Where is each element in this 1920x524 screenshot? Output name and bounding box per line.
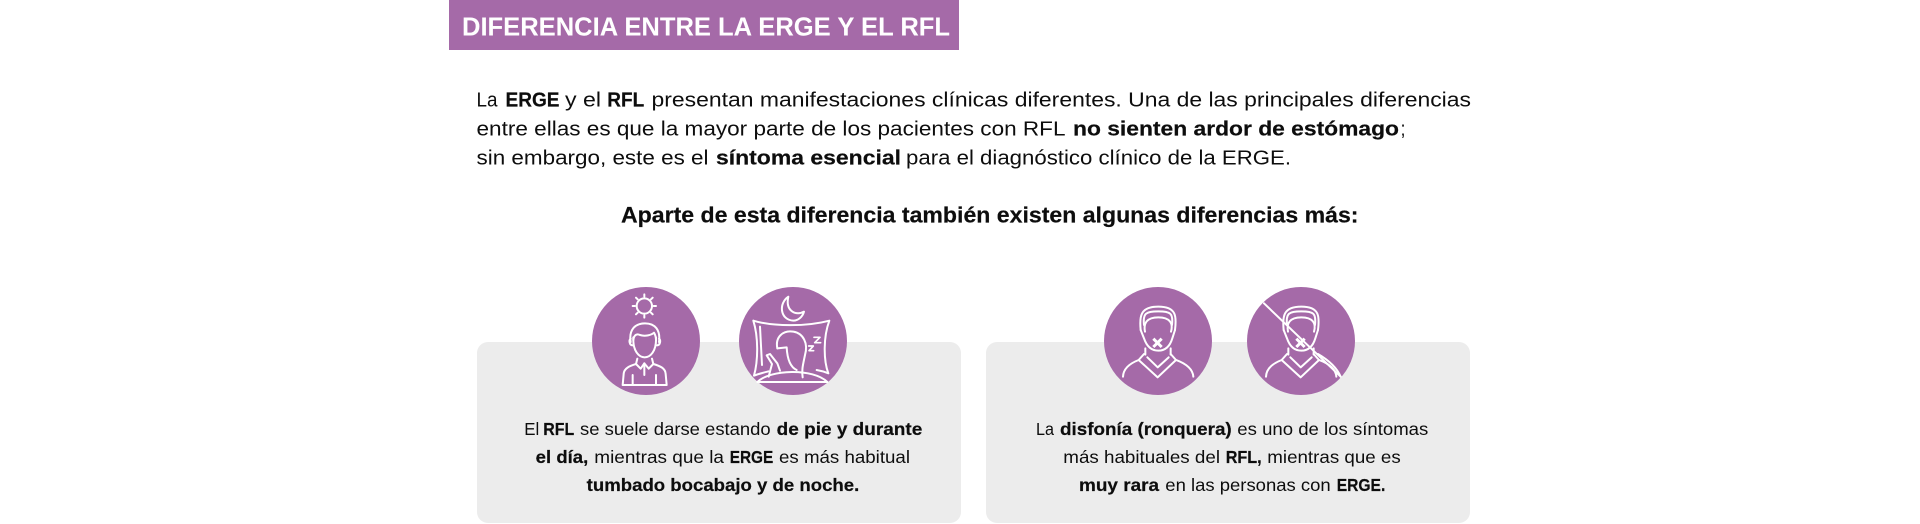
- intro paragraph: ;: [1400, 118, 1406, 140]
- panel text: hoarseness common in RFL, rare in ERGE: ERGE.: [1337, 475, 1385, 495]
- panel text: RFL standing by day, ERGE lying at night: ERGE: [730, 447, 773, 467]
- subheading: Aparte de esta diferencia también existen algunas diferencias más:: [621, 202, 1358, 228]
- intro paragraph: para el diagnóstico clínico de la ERGE.: [906, 146, 1291, 170]
- panel text: RFL standing by day, ERGE lying at night: el día,: [536, 447, 588, 467]
- panel text: RFL standing by day, ERGE lying at night: se suele darse estando: [580, 419, 771, 439]
- panel text: hoarseness common in RFL, rare in ERGE: RFL,: [1226, 447, 1262, 467]
- panel text: hoarseness common in RFL, rare in ERGE: más habituales del: [1063, 447, 1220, 467]
- panel text: RFL standing by day, ERGE lying at night: de pie y durante: [777, 419, 923, 439]
- intro paragraph: La: [476, 88, 498, 112]
- title text: DIFERENCIA ENTRE LA ERGE Y EL RFL: [462, 14, 950, 42]
- panel: hoarseness: [986, 342, 1470, 523]
- panel text: RFL standing by day, ERGE lying at night: tumbado bocabajo y de noche.: [587, 475, 859, 495]
- panel text: RFL standing by day, ERGE lying at night: [524, 419, 923, 495]
- panel text: hoarseness common in RFL, rare in ERGE: mientras que es: [1267, 447, 1401, 467]
- panel: posture and time of day: [477, 342, 961, 523]
- panel text: RFL standing by day, ERGE lying at night: El: [524, 419, 539, 439]
- intro paragraph: entre ellas es que la mayor parte de los pacientes con RFL: [476, 118, 1066, 140]
- intro paragraph: presentan manifestaciones clínicas diferentes. Una de las principales diferencias: [652, 88, 1471, 112]
- intro paragraph: [476, 88, 1471, 170]
- intro paragraph: ERGE: [506, 88, 560, 112]
- icon: person sleeping at night: [739, 287, 847, 395]
- panel text: hoarseness common in RFL, rare in ERGE: [1036, 419, 1429, 495]
- panel text: hoarseness common in RFL, rare in ERGE: es uno de los síntomas: [1237, 419, 1429, 439]
- intro paragraph: RFL: [607, 88, 644, 112]
- panel text: hoarseness common in RFL, rare in ERGE: en las personas con: [1165, 475, 1331, 495]
- panel text: RFL standing by day, ERGE lying at night: RFL: [543, 419, 575, 439]
- panel text: RFL standing by day, ERGE lying at night: es más habitual: [779, 447, 910, 467]
- intro paragraph: síntoma esencial: [716, 146, 901, 170]
- panel text: RFL standing by day, ERGE lying at night: mientras que la: [594, 447, 724, 467]
- panel text: hoarseness common in RFL, rare in ERGE: muy rara: [1079, 475, 1159, 495]
- icon: man with crossed mouth, struck through: [1247, 287, 1355, 395]
- panel text: hoarseness common in RFL, rare in ERGE: disfonía (ronquera): [1060, 419, 1232, 439]
- icon: man standing under the sun: [592, 287, 700, 395]
- intro paragraph: sin embargo, este es el: [476, 146, 708, 170]
- title banner: [449, 0, 959, 50]
- intro paragraph: no sienten ardor de estómago: [1073, 118, 1399, 140]
- icon: man with crossed mouth: [1104, 287, 1212, 395]
- intro paragraph: y el: [565, 88, 601, 112]
- panel text: hoarseness common in RFL, rare in ERGE: La: [1036, 419, 1054, 439]
